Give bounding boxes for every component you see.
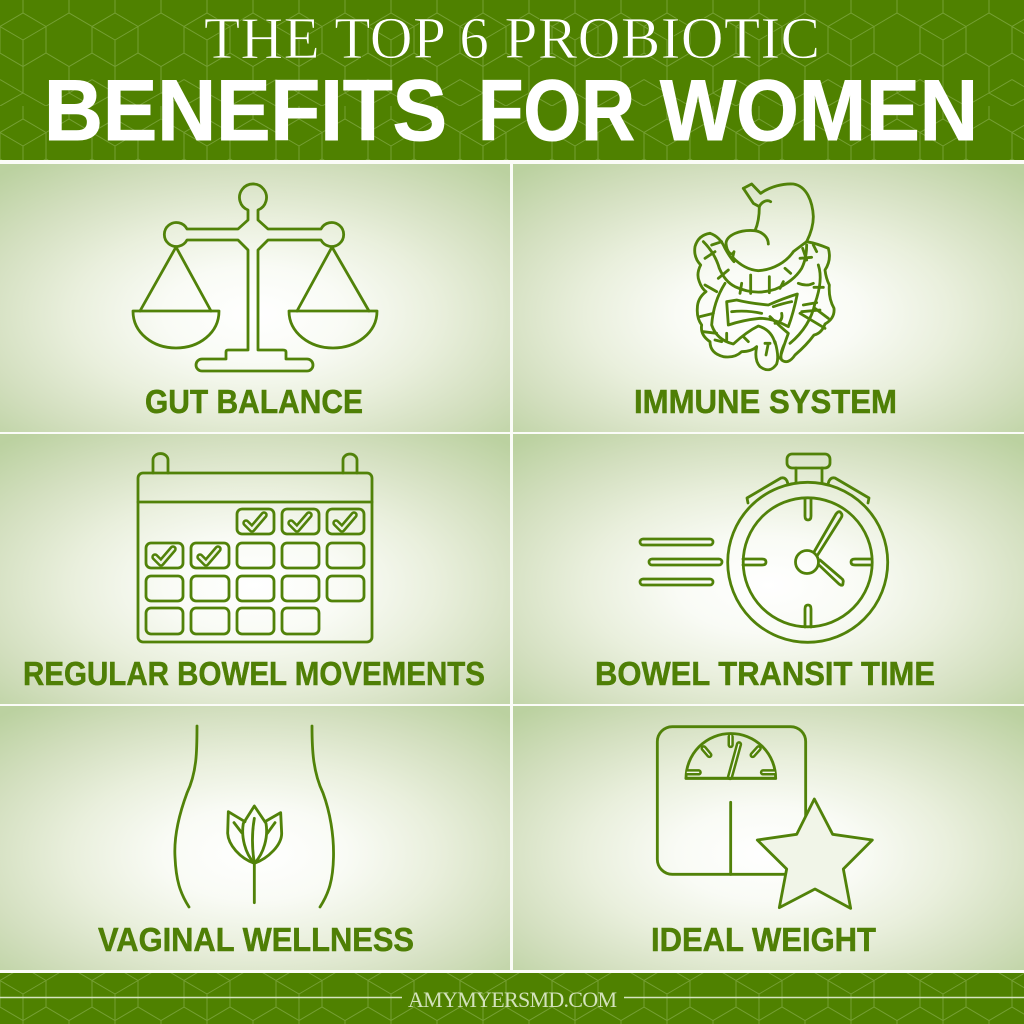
title line 2 xyxy=(44,63,978,159)
panel: bowel transit time xyxy=(513,434,1024,704)
label: vaginal wellness: VAGINAL WELLNESS xyxy=(98,921,414,958)
panel: ideal weight xyxy=(513,706,1024,970)
footer url: AMYMYERSMD.COM xyxy=(408,987,617,1012)
header band xyxy=(0,0,1024,160)
label: bowel transit time: BOWEL TRANSIT TIME xyxy=(595,655,935,692)
title line 2: FOR xyxy=(478,63,635,159)
icon: body outline xyxy=(175,726,334,907)
icon: check marks xyxy=(155,515,354,563)
icon: flower xyxy=(228,806,282,903)
title line 2: BENEFITS xyxy=(44,63,447,159)
icon: calendar xyxy=(138,454,372,642)
icon: balance scale xyxy=(133,184,377,371)
label: ideal weight: IDEAL WEIGHT xyxy=(651,921,876,958)
panel: gut balance xyxy=(0,164,510,432)
panel: immune system xyxy=(513,164,1024,432)
icon: weighing scale xyxy=(657,727,872,908)
title line 1: THE TOP 6 PROBIOTIC xyxy=(204,5,820,71)
panel: vaginal wellness xyxy=(0,706,510,970)
footer band xyxy=(0,973,1024,1024)
icon: stopwatch xyxy=(640,454,888,642)
label: regular bowel movements: REGULAR BOWEL MOVEMENTS xyxy=(23,655,485,692)
icon: speed lines xyxy=(640,539,722,585)
label: gut balance: GUT BALANCE xyxy=(145,383,363,420)
title line 2: WOMEN xyxy=(660,63,978,159)
label: immune system: IMMUNE SYSTEM xyxy=(634,383,897,420)
icon: star xyxy=(757,799,872,908)
panel: regular bowel movements xyxy=(0,434,510,704)
icon: digestive system xyxy=(695,184,834,370)
